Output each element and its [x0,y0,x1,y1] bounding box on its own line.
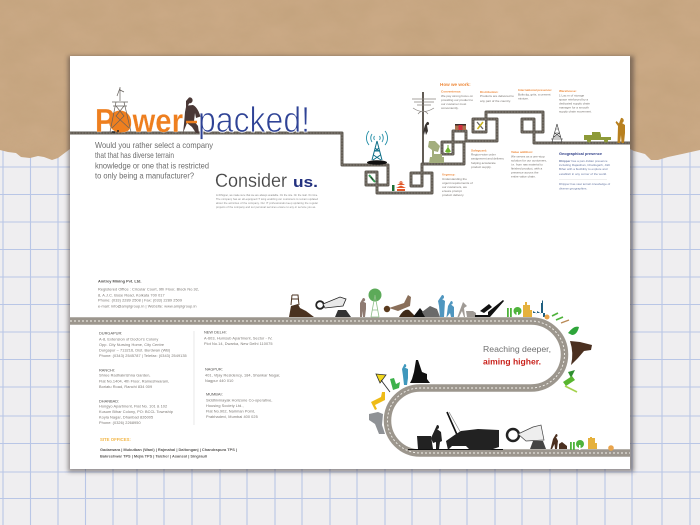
office: Dhanbad: Kusum Bihar Colony, PO: BCCL Township [99,410,173,414]
right curve scenery [544,313,592,392]
icon: surveyor silhouette [616,118,625,143]
body: geographical presence: establish in any corner of the world. [559,172,607,176]
office: Mumbai: Housing Society Ltd., [206,404,244,408]
block: safeguard: product supply. [471,165,492,169]
icon: rope shovel [446,412,499,450]
block: safeguard: Safeguard: [471,148,487,152]
block: value addition: We serves as a one-stop [511,154,545,158]
icon: small orange and green plants [544,313,569,323]
icon: bucket wheel machine [507,425,546,449]
address [98,288,199,308]
heading: Consider us.: us. [293,174,318,191]
company name: Amtrey Mining Pvt. Ltd. [98,278,141,284]
office: New Delhi: Plot No.14, Dwarka, New Delhi 110075 [204,342,273,346]
block: urgency [442,172,473,197]
site offices: Gadarwara | Mukutban (Wani) | Rajmahal | Daltonganj | Chandrapura TPS | [100,448,237,452]
block: urgency: Understanding the [442,177,467,181]
block: warehouse [559,89,592,114]
block: warehouse: Warehouse: [559,89,577,93]
block: warehouse: manager for a smooth [559,106,589,110]
icon: truck [584,132,611,142]
icon: transmission tower [110,87,131,132]
icon: bottle and pagoda [392,181,406,191]
icon: black excavator [410,360,430,383]
block: safeguard: assignment and delivery [471,156,504,160]
icon: worker on phone [183,97,200,133]
block: distribution: Distribution: [480,90,498,94]
site offices [100,437,237,458]
left curve scenery [369,360,430,434]
icon: green trees [570,440,584,450]
block: convenience: providing our product to [441,98,473,102]
icon: utility pole with lineman [412,92,436,164]
office: Durgapur: A-8, Extension of Doctor's Colony [99,338,158,342]
heading: Consider us.: Consider [215,170,287,192]
block: safeguard: helping accelerate [471,161,496,165]
office: Durgapur [99,330,187,358]
office: New Delhi [204,330,273,346]
block: safeguard: Region-wise order [471,152,496,156]
intro question [95,141,214,180]
icon: green leaves [568,327,579,335]
icon: radio tower [366,131,388,165]
block: international presence [518,88,552,100]
icon: standing man [360,298,366,317]
block: distribution: Products are delivered to [480,94,514,98]
block: international presence: Bolts-jig, grits, a cement [518,92,551,96]
block: value addition: presence across the [511,170,539,174]
block: value addition: Value addition: [511,150,533,154]
office: Ranchi: Shree Radhakrishna Garden, [99,374,151,378]
heading word: Power: Power [95,102,183,139]
consider us body text: about the activities of the company. Our IT professionals keep updating the regular [216,202,318,205]
body: geographical presence [559,159,610,176]
heading word: packed!: packed! [198,99,310,140]
icon: lattice tower [551,124,563,142]
icon: red gate [455,124,466,130]
office: New Delhi: NEW DELHI: [204,330,227,334]
block: international presence: mixture. [518,96,529,100]
office: Durgapur: Durgapur – 713216, Dist. Burdwan (WB) [99,348,171,352]
office: Mumbai: Flat No.902, Nariman Point, [206,410,255,414]
block: safeguard [471,148,504,169]
slogan: aiming higher. [483,356,541,366]
icon: yellow digger arm [371,392,385,410]
site offices: SITE OFFICES: [100,437,131,442]
icon: brown rock [570,341,592,365]
slogan [483,344,551,366]
site offices: Bakreshwar TPS | Mejia TPS | Talcher | Asansol | Singrauli [100,454,207,458]
note: terrain knowledge: Dhipper has vast terrain knowledge of [559,182,610,186]
office: Durgapur: Opp. City Nursing Home, City Centre [99,343,164,347]
heading: Power-packed! [95,87,310,140]
office: Dhanbad: DHANBAD: [99,398,119,404]
office: Dhanbad: Phone: (0326) 2268950 [99,421,141,425]
office: Nagpur: NAGPUR: [205,366,223,372]
office: Nagpur [205,366,280,383]
office: New Delhi: A-603, Humsub Apartment, Sector - IV, [204,336,273,340]
office: Nagpur: 401, Vijay Residency, 184, Shankar Nagar, [205,374,280,378]
block: value addition [511,150,547,178]
icon: spoil heaps [413,306,440,317]
icon: orange sphere [608,445,614,451]
intro question: Would you rather select a company [95,141,214,150]
office: Ranchi: Boriatu Road, Ranchi 834 009 [99,385,152,389]
icon: green leaf [390,378,400,390]
block: warehouse: 1 Lac m of storage [559,94,585,98]
block: urgency: product delivery. [442,193,464,197]
upper winding road [70,112,630,193]
block: urgency: urgent requirements of [442,181,473,185]
icon: black crane [475,300,504,317]
office: Mumbai [206,392,272,419]
top road machinery row [289,288,545,317]
geographical presence [559,151,610,190]
icon: green plants and stripes [563,370,577,392]
icon: warning sign [376,374,390,392]
address: 8, A.J.C. Bose Road, Kolkata 700 017 [98,294,165,298]
icon: spanner box [476,120,485,130]
block: value addition: entire value chain. [511,174,536,178]
office: Ranchi: Flat No.1404, 4th Floor, Rameshwaram, [99,380,169,384]
block: convenience [441,90,473,110]
block: convenience: We pay strong focus on [441,94,473,98]
icon: bucket wheel machine [384,295,416,317]
icon: windmill [368,288,382,317]
office: Ranchi [99,368,169,389]
office: Dhanbad [99,398,173,425]
icon: man and dog [550,434,567,449]
block: distribution: any part of the country. [480,99,511,103]
body: geographical presence: including Rajasthan, Chattisgarh, J&K [559,163,610,167]
block: convenience: conveniently. [441,106,459,110]
office: Dhanbad: Hongyo Apartment, Flat No. 101 & 102 [99,404,167,408]
office: Mumbai: Siddhivinayak Horizone Co-operative, [206,398,272,402]
office addresses [99,330,280,458]
block: warehouse: supply chain movement. [559,110,592,114]
icon: man and cart [417,425,442,449]
block: urgency: ensure prompt [442,189,462,193]
consider us body text: projects of the company and our personal services ensure to any or service you as. [216,206,316,209]
icon: brown drill rig [289,295,314,317]
icon: orange globe over the letter o [109,110,131,132]
office: Mumbai: Prabhadevi, Mumbai 400 025 [206,415,258,419]
background: torn kraft paper [0,0,700,170]
white brochure page [70,56,630,469]
icon: grey man and dog [458,302,476,317]
block: value addition: solution for our customers, [511,158,547,162]
intro question: that that has diverse terrain [95,151,174,160]
consider us body text [216,194,319,209]
block: convenience: our customer most [441,102,466,106]
block: warehouse: space reinforced by a [559,98,588,102]
block: urgency: Urgency: [442,172,455,176]
office: Mumbai: MUMBAI: [206,392,223,396]
note: terrain knowledge: diverse geographies. [559,186,587,190]
contact: head office [98,278,199,308]
office: Durgapur: Phone: (0343) 2545787 | Telefax: (0343) 2549135 [99,354,187,358]
address: e-mail: info@amplgroup.in | Website: www.amplgroup.in [98,304,197,308]
slogan: Reaching deeper, [483,344,551,354]
icon: wheel excavator [316,297,351,317]
office: Durgapur: DURGAPUR: [99,330,122,336]
heading: geographical presence: Geographical presence [559,151,603,156]
note: terrain knowledge [559,182,610,190]
body: geographical presence: Dhipper has a pan-Indian presence [559,159,608,163]
block: value addition: finished product, with a [511,166,542,170]
lower road [70,321,630,453]
block: warehouse: dedicated supply chain [559,102,590,106]
how we work text blocks [440,82,592,197]
block: international presence: International presence: [518,88,552,92]
icon: yellow building [588,437,597,449]
block: distribution [480,90,514,103]
block: value addition: i.e. from raw material to [511,162,543,166]
page shadow [68,56,634,472]
icon: green trees [507,307,522,317]
icon: tree and generator [428,141,444,163]
icon: blue workers [438,295,454,317]
block: urgency: our customers, we [442,185,467,189]
intro question: knowledge or one that is restricted [95,162,209,170]
office: Dhanbad: Koyla Nagar, Dhanbad 826005 [99,416,153,420]
icon: green bulb [444,144,452,153]
consider us body text: The company has an all-equipped IT wing enabling our customers to remain updated [216,198,319,201]
bottom road machinery row [408,412,614,451]
office: Nagpur: Nagpur 440 010 [205,379,233,383]
icon: blue man [402,364,408,385]
intro question: to only being a manufacturer? [95,172,194,180]
address: Phone: (033) 2289 2508 | Fax: (033) 2289 2509 [98,298,182,302]
body: geographical presence: Bihar with a flexibility to explore and [559,167,608,171]
consider us body text: At Dhipper, we make sure that we are always available. On the site. On the mail. On time. [216,194,318,197]
icon: grey machine [369,412,385,434]
office: Ranchi: RANCHI: [99,368,115,372]
heading: how we work: How we work: [440,82,471,87]
icon: blue factory [533,300,545,317]
address: Registered Office : Circular Court, 9th Floor, Block No.92, [98,288,199,292]
icon: box with spanner [368,174,376,183]
icon: yellow building [523,302,532,317]
block: convenience: Convenience: [441,90,461,94]
